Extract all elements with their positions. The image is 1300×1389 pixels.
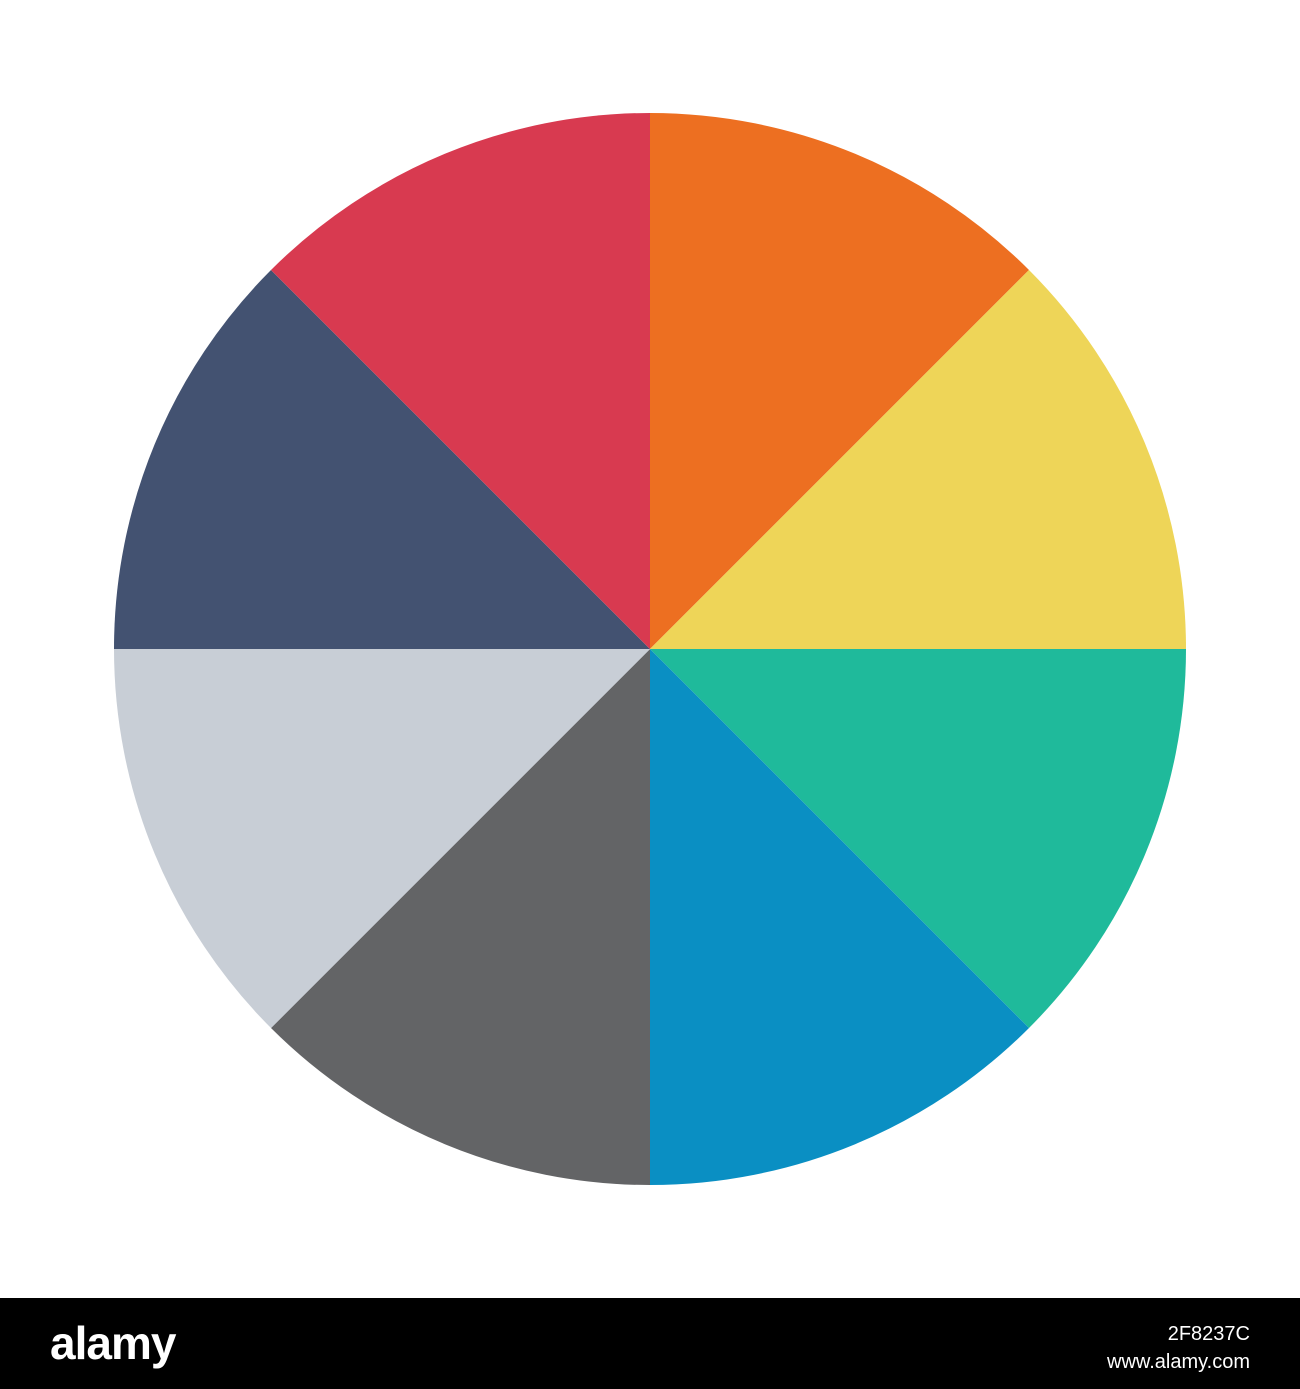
slice: yellow [650,270,1186,649]
image id: www.alamy.com [1107,1351,1250,1373]
image id: 2F8237C [1168,1323,1250,1345]
image id [1107,1323,1250,1373]
slice: blue [650,649,1029,1185]
slice: dark gray [271,649,650,1185]
slice: orange [650,113,1029,649]
logo text: alamy [50,1317,175,1369]
slice: green [650,649,1186,1028]
footer bar [0,1298,1300,1389]
slice: navy [114,270,650,649]
slice: red [271,113,650,649]
slice: light gray [114,649,650,1028]
